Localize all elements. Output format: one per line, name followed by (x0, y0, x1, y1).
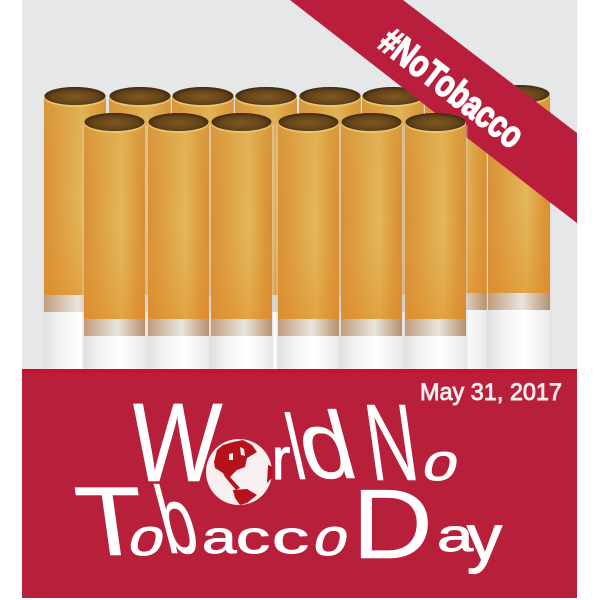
title line 2: Tobacco Day: T (70, 467, 152, 577)
title line 2: Tobacco Day: y (467, 502, 502, 574)
cigarette: back 4 (234, 87, 298, 372)
title line 1: World No: W (128, 381, 224, 506)
title line 2: Tobacco Day: c (272, 513, 309, 563)
title line 2: Tobacco Day: a (202, 513, 237, 563)
cigarette: front 1 (82, 113, 146, 372)
cigarette: front 6 (404, 113, 468, 372)
title line 1: World No (128, 381, 466, 506)
cigarette: back 6 (360, 87, 426, 372)
ribbon: #NoTobacco band (290, 0, 577, 223)
back row of cigarettes (42, 85, 552, 372)
title line 2: Tobacco Day: c (236, 513, 270, 563)
title line 2: Tobacco Day: D (352, 470, 433, 579)
cigarette: front 2 (146, 113, 210, 372)
cigarette: back 2 (108, 87, 172, 372)
cigarette: back 1 (42, 87, 108, 372)
cigarette: back 3 (170, 87, 236, 372)
title line 2: Tobacco Day: a (437, 510, 474, 561)
cigarette: back 8 (486, 85, 552, 370)
icon: globe (206, 439, 273, 505)
title line 2: Tobacco Day (70, 467, 502, 579)
title line 2: Tobacco Day: o (123, 509, 172, 567)
ribbon text: hashtag: #NoTobacco (371, 20, 532, 157)
cigarette: back 5 (298, 87, 362, 372)
footer top accent band (22, 369, 577, 373)
title line 1: World No: N (358, 382, 424, 504)
title line 1: World No: o (417, 434, 466, 492)
cigarette: back 7 (424, 85, 488, 370)
panel: gray background (22, 0, 577, 372)
cigarette: front 5 (340, 113, 404, 372)
title line 1: World No: d (285, 393, 366, 499)
title line 2: Tobacco Day: b (145, 469, 208, 574)
date: May 31, 2017 (420, 379, 562, 406)
title line 2: Tobacco Day: o (308, 509, 356, 567)
title line 1: World No: r (272, 427, 290, 491)
front row of cigarettes (82, 113, 468, 372)
panel: red footer (22, 369, 577, 598)
title: World No Tobacco Day (70, 381, 502, 579)
cigarette: front 4 (276, 113, 340, 372)
cigarette: front 3 (210, 113, 274, 372)
title line 1: World No: l (277, 395, 314, 499)
